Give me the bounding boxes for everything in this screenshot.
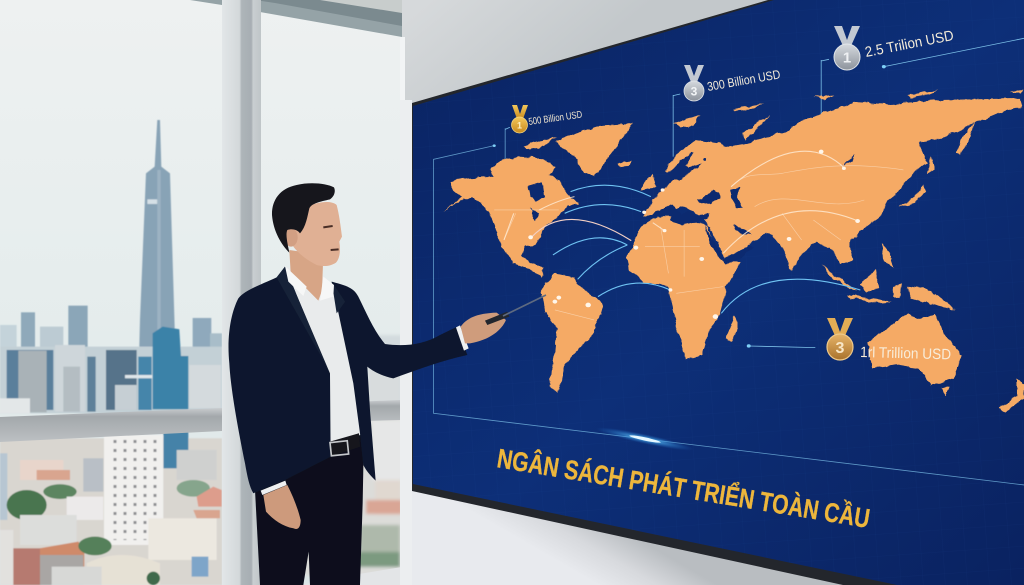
central mullion [222,0,261,585]
world map [433,38,1024,485]
new zealand [999,378,1024,413]
leader lines and map frame [433,38,1024,485]
medal: bronze 1rl Trillion USD: 3 [836,340,845,357]
label: 500 Billion USD [528,110,583,128]
madagascar [725,315,738,342]
north america [443,157,578,277]
pointer wand [503,295,546,316]
left hand [263,485,301,529]
shirt [285,267,361,442]
top frame bands [190,0,402,37]
location dots [528,150,860,319]
label: 2.5 Trilion USD [864,28,955,61]
medal: silver 300 Billion USD: 3 [691,84,698,98]
greenland [555,124,632,177]
eye and mouth [323,226,339,250]
collar [285,266,334,301]
right shirt cuff [456,325,469,351]
bays of north america [524,154,854,267]
trousers [255,433,364,585]
horizontal transom left [0,408,222,442]
new guinea [907,287,955,310]
eurasia [643,98,1023,271]
medal: gold 500 Billion USD [512,105,583,133]
belt and buckle [330,433,360,456]
continents [443,90,1024,413]
medal: bronze 1rl Trillion USD [827,318,951,363]
white wall pillar and wall [400,0,1024,585]
southeast asia and indonesia [821,243,901,303]
wall-mounted screen [412,0,1024,585]
connection arcs [504,151,860,313]
city skyline, right window pane [262,335,402,575]
medal: gold 500 Billion USD: 1 [517,120,522,130]
medal: silver 300 Billion USD [684,65,781,101]
medal: silver 2.5 Trilion USD: 1 [843,50,851,66]
window sill [300,567,402,585]
medal: silver 2.5 Trilion USD [834,26,955,70]
country borders [494,166,903,320]
jacket [229,267,467,493]
screen frame [412,0,1024,585]
horizon glow line [595,424,695,454]
australia [868,313,962,385]
landmark tower [139,120,175,347]
south america [541,273,603,394]
UK and Ireland [641,173,656,190]
inland seas of europe and the middle east [647,153,753,264]
arctic islands [490,137,557,173]
face [290,202,342,266]
label: 300 Billion USD [706,67,781,94]
africa [627,217,740,359]
remote [485,312,509,325]
pointing hand [461,313,506,343]
neck [289,250,323,301]
horizontal transom right [261,400,400,424]
presenter [229,183,509,585]
window frame [0,0,402,585]
hair [272,183,335,253]
city skyline, left window pane [0,120,222,585]
screen surface [413,0,1024,585]
japan, kamchatka and sakhalin [900,123,975,207]
label: 1rl Trillion USD [860,344,951,363]
lower city [0,438,222,585]
northern islands [673,90,1023,140]
title: NGÂN SÁCH PHÁT TRIỂN TOÀN CẦU [495,442,872,534]
left shirt cuff [261,481,287,495]
window background: sky [0,0,402,585]
